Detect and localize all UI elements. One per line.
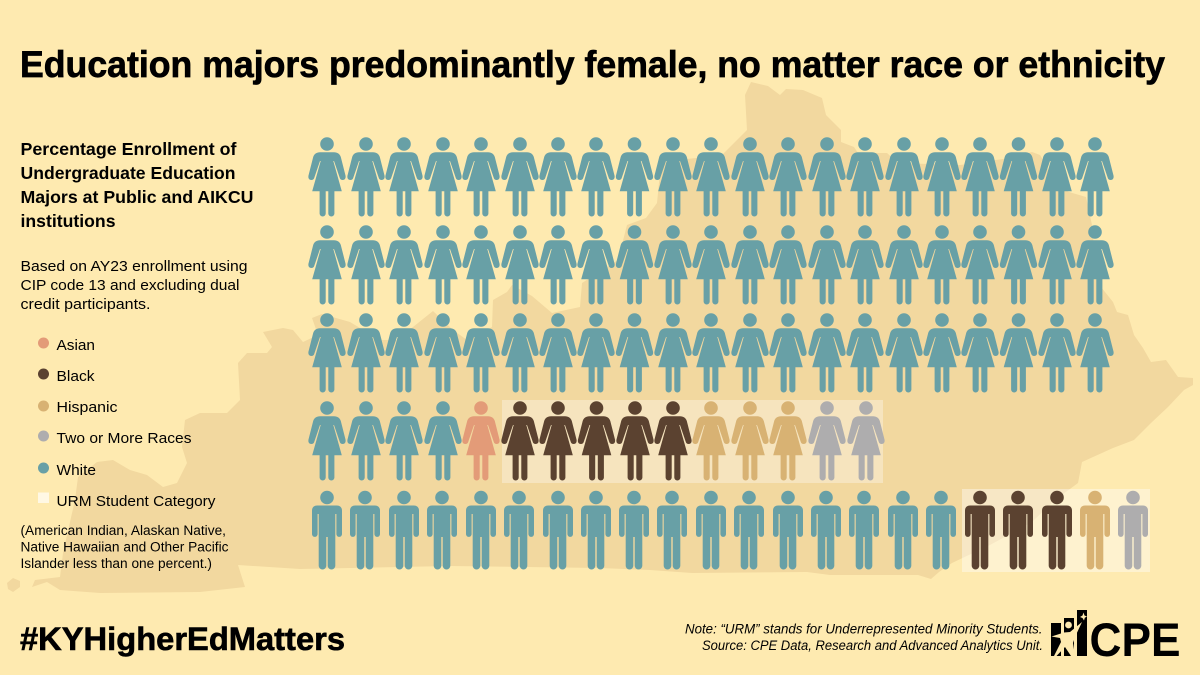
women: Asian bbox=[462, 401, 500, 481]
women: Black bbox=[501, 401, 692, 481]
description text: CIP code 13 and excluding dual bbox=[20, 277, 240, 294]
source note bbox=[685, 622, 1043, 653]
men: White bbox=[312, 491, 956, 570]
description text: credit participants. bbox=[20, 296, 150, 313]
pictogram row 3: women, White bbox=[308, 313, 1114, 393]
pictogram row 4: women by race bbox=[308, 401, 885, 481]
legend bbox=[38, 337, 216, 510]
legend item: Black bbox=[38, 368, 95, 385]
legend item: Asian: Asian bbox=[56, 337, 95, 354]
heading: chart subject: Undergraduate Education bbox=[20, 163, 236, 183]
pictogram row 5: men by race bbox=[312, 491, 1148, 570]
description text: Based on AY23 enrollment using bbox=[20, 258, 248, 275]
heading: chart subject: Majors at Public and AIKCU bbox=[20, 187, 254, 207]
heading: chart subject: institutions bbox=[20, 211, 116, 231]
legend item: White bbox=[38, 462, 96, 479]
hashtag: #KYHigherEdMatters bbox=[20, 621, 345, 657]
men: Black bbox=[965, 491, 1072, 570]
heading: chart subject: Percentage Enrollment of bbox=[20, 139, 237, 159]
pictogram row 2: women, White bbox=[308, 225, 1114, 305]
map of Kentucky bbox=[7, 82, 1193, 593]
women: White bbox=[308, 401, 462, 481]
men: Hispanic bbox=[1080, 491, 1110, 570]
logo: CPE bbox=[1051, 610, 1180, 666]
URM highlight: women bbox=[502, 400, 883, 483]
women: Hispanic bbox=[692, 401, 807, 481]
legend footnote: Islander less than one percent.) bbox=[20, 556, 212, 571]
women: Two or More Races bbox=[808, 401, 885, 481]
legend footnote: Native Hawaiian and Other Pacific bbox=[20, 540, 229, 554]
legend footnote: (American Indian, Alaskan Native, bbox=[20, 523, 226, 538]
description text bbox=[20, 258, 248, 313]
logo text: CPE bbox=[1090, 613, 1180, 666]
heading: chart subject bbox=[20, 139, 254, 231]
legend footnote bbox=[20, 523, 229, 571]
icon: bars with rising figure bbox=[1051, 610, 1087, 656]
source note: Note: “URM” stands for Underrepresented Minority Students. bbox=[685, 622, 1042, 636]
legend item: Black: Black bbox=[56, 368, 95, 385]
pictogram row 1: women, White bbox=[308, 137, 1114, 217]
URM highlight: men bbox=[962, 489, 1150, 572]
legend item: White: White bbox=[56, 462, 96, 479]
title: Education majors predominantly female, no matter race or ethnicity bbox=[20, 44, 1165, 85]
legend item: Asian bbox=[38, 337, 95, 354]
legend item: URM Student Category: URM Student Category bbox=[56, 493, 216, 510]
legend item: Two or More Races: Two or More Races bbox=[56, 430, 192, 447]
legend item: Hispanic: Hispanic bbox=[56, 399, 118, 416]
men: Two or More Races bbox=[1118, 491, 1148, 570]
source note: Source: CPE Data, Research and Advanced Analytics Unit. bbox=[702, 638, 1043, 653]
